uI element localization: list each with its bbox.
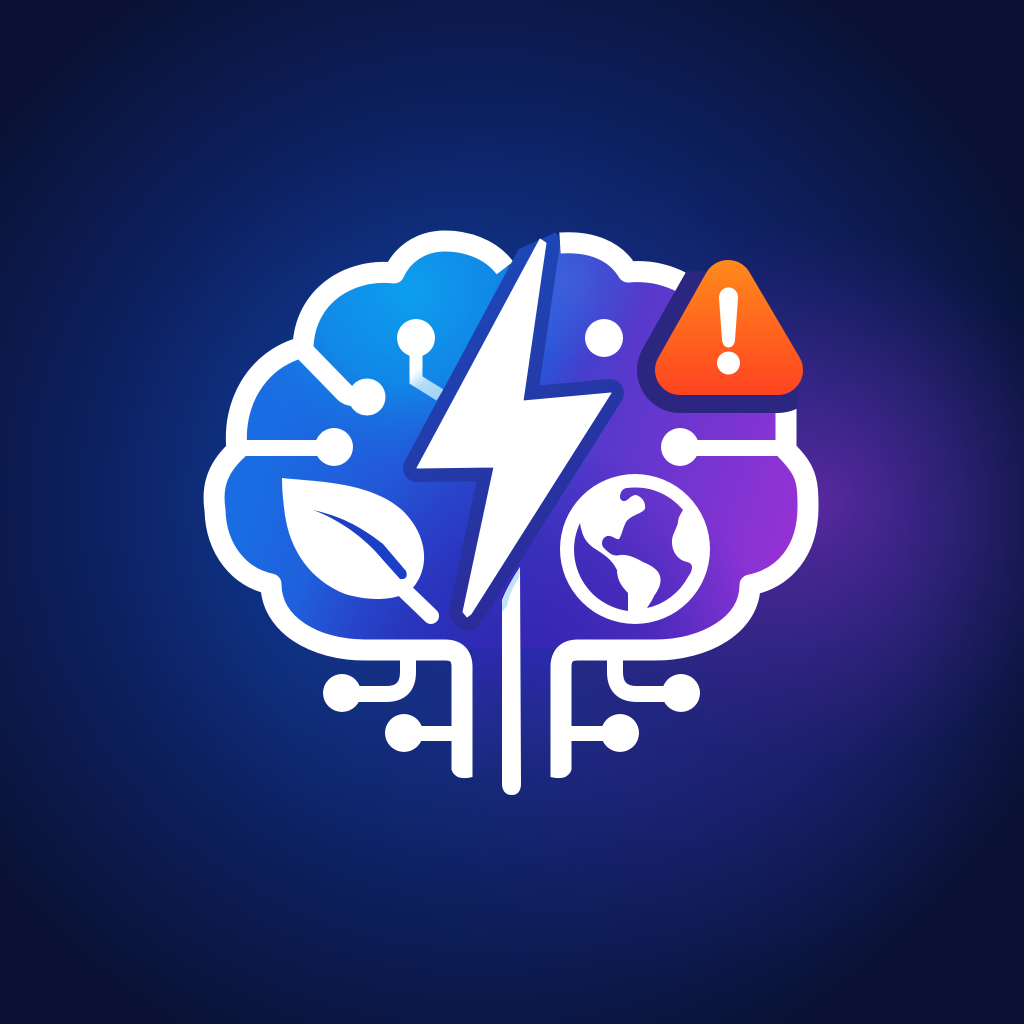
leaf vein — [313, 510, 407, 579]
lower circuit branches — [323, 658, 700, 752]
branch: lower right node — [561, 714, 639, 752]
branch: lower left upper node — [323, 658, 408, 712]
exclamation bar — [719, 288, 738, 348]
outline foot right — [550, 768, 572, 778]
alert halo — [680, 285, 778, 370]
icon: globe — [560, 474, 710, 624]
brain outline right — [560, 243, 808, 770]
node: upper centre with fading stem — [397, 319, 440, 395]
node: upper left diagonal — [305, 352, 386, 416]
bolt shape — [417, 239, 611, 617]
branch: lower left node — [385, 714, 462, 752]
exclamation dot — [717, 352, 740, 374]
brain — [214, 241, 808, 780]
branch: lower right upper node — [615, 658, 700, 712]
icon: leaf — [282, 478, 431, 616]
bolt halo — [417, 239, 610, 617]
node: left horizontal — [240, 428, 353, 466]
brain fill — [214, 241, 808, 780]
lightning bolt — [417, 239, 611, 617]
circuit nodes inside the brain — [240, 319, 790, 466]
outline foot left — [452, 768, 472, 778]
node: upper right — [585, 319, 623, 357]
centre stem line — [502, 567, 521, 795]
brain outline left — [214, 241, 505, 770]
node: right horizontal — [661, 428, 790, 466]
alert body — [680, 285, 778, 370]
alert triangle — [680, 285, 778, 374]
